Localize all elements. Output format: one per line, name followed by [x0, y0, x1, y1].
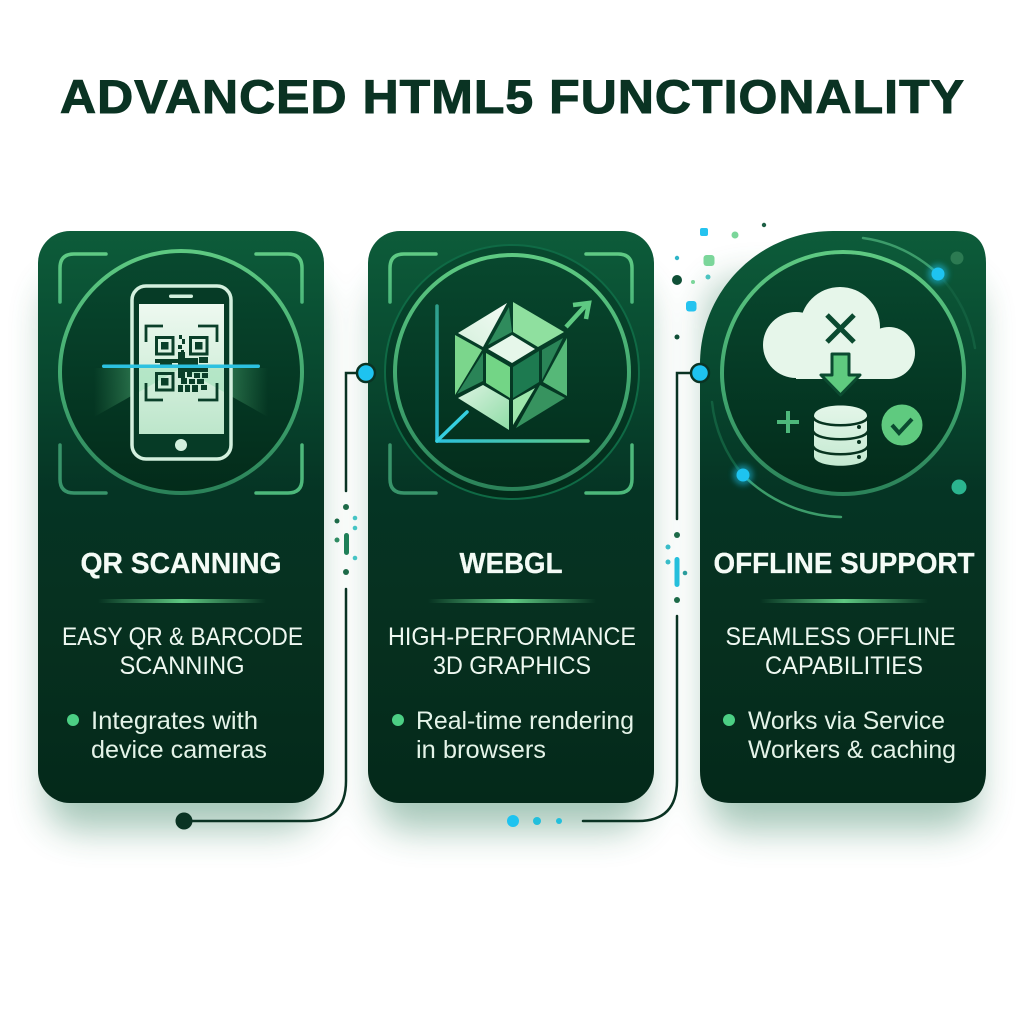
card shadows	[46, 280, 978, 830]
divider	[98, 599, 266, 603]
panel: Offline support	[700, 231, 986, 803]
divider	[760, 599, 928, 603]
heading: OFFLINE SUPPORT	[714, 548, 975, 580]
icon: outer ring	[385, 245, 639, 499]
icon: X mark	[827, 315, 854, 342]
subtitle: HIGH-PERFORMANCE	[388, 623, 636, 651]
subtitle: 3D GRAPHICS	[433, 652, 591, 680]
bullet: Integrates with	[91, 707, 258, 735]
subtitle: CAPABILITIES	[765, 652, 923, 680]
icon: check badge	[882, 404, 922, 446]
icon: orbit dots	[733, 252, 966, 494]
panel: WebGL	[368, 231, 654, 803]
bullet: in browsers	[416, 736, 546, 764]
bullet	[392, 707, 634, 764]
icon: phone with QR code	[132, 286, 231, 459]
card background	[38, 231, 324, 803]
bottom blue dots	[507, 815, 562, 827]
icon: download arrow	[821, 354, 860, 395]
bullet: Real-time rendering	[416, 707, 634, 735]
icon: axes	[437, 306, 588, 441]
icon: scan corner brackets	[60, 254, 302, 493]
icon: arrow	[566, 303, 589, 327]
subtitle	[726, 623, 956, 680]
icon: ring	[60, 251, 302, 493]
bullet	[67, 707, 267, 764]
icon: orbit arcs	[712, 238, 975, 517]
icon: ring	[395, 255, 629, 489]
connector dots: QR to WebGL	[334, 504, 357, 575]
icon: database	[813, 406, 868, 466]
subtitle: SEAMLESS OFFLINE	[726, 623, 956, 651]
bullet: Workers & caching	[748, 736, 956, 764]
icon: 3D polyhedron	[455, 302, 567, 430]
subtitle: EASY QR & BARCODE	[62, 623, 303, 651]
title: ADVANCED HTML5 FUNCTIONALITY	[60, 70, 965, 123]
connector: WebGL to Offline	[583, 364, 709, 821]
icon: cloud	[763, 287, 915, 379]
bullet: Works via Service	[748, 707, 945, 735]
scan line	[102, 364, 260, 368]
subtitle	[388, 623, 636, 680]
subtitle	[62, 623, 303, 680]
card background	[700, 231, 986, 803]
divider	[428, 599, 596, 603]
icon: scanning beams	[94, 368, 268, 417]
bullet	[723, 707, 956, 764]
heading: WEBGL	[460, 548, 562, 580]
bullet: device cameras	[91, 736, 267, 764]
icon: disc	[722, 252, 964, 494]
card background	[368, 231, 654, 803]
heading: QR SCANNING	[80, 548, 282, 580]
subtitle: SCANNING	[120, 652, 244, 680]
icon: plus	[777, 411, 799, 433]
icon: corner brackets	[390, 254, 632, 493]
connector dots: WebGL to Offline	[666, 532, 687, 603]
floating particles	[672, 223, 766, 340]
connector: QR to WebGL	[176, 364, 375, 830]
panel: QR scanning	[38, 231, 324, 803]
